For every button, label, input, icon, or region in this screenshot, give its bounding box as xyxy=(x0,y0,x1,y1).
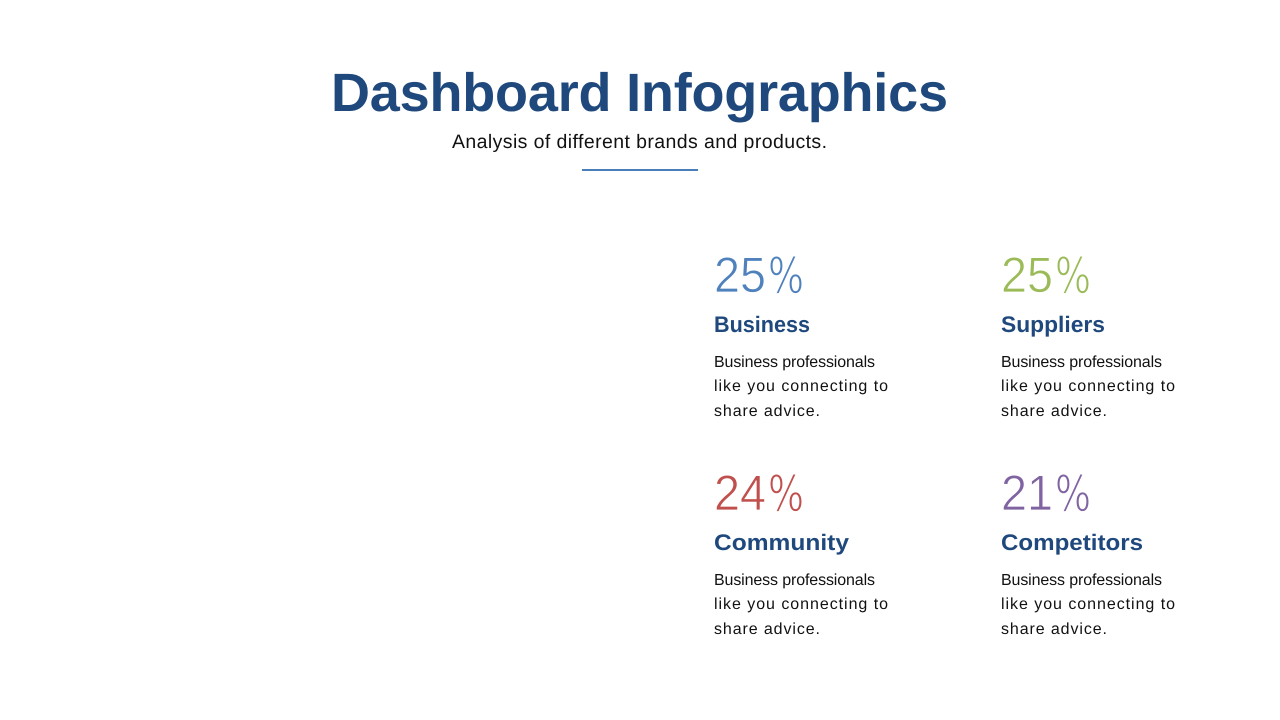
text block: competitors description: Business professionals xyxy=(1001,572,1162,589)
text block: suppliers description: share advice. xyxy=(1001,403,1107,420)
panel: competitors xyxy=(1001,465,1175,638)
text block: competitors description: like you connecting to xyxy=(1001,596,1175,613)
stat: 24% community: % xyxy=(768,465,804,523)
stat: 25% business: 25 xyxy=(714,247,766,303)
text block: community description: share advice. xyxy=(714,621,820,638)
text block: community description: Business professionals xyxy=(714,572,875,589)
panel: community xyxy=(714,465,888,638)
heading: business: Business xyxy=(714,312,810,337)
stat: 24% community: 24 xyxy=(714,465,766,521)
subtitle: Analysis of different brands and products. xyxy=(452,131,827,153)
stat: 25% suppliers: % xyxy=(1055,247,1091,305)
divider under the title xyxy=(582,169,698,171)
text block: suppliers description: Business professionals xyxy=(1001,354,1162,371)
stat: 21% competitors: % xyxy=(1055,465,1091,523)
title: Dashboard Infographics xyxy=(331,63,948,123)
stat: 21% competitors: 21 xyxy=(1001,465,1053,521)
heading: community: Community xyxy=(714,530,850,555)
panel: suppliers xyxy=(1001,247,1175,420)
panel: business xyxy=(714,247,888,420)
text block: community description: like you connecting to xyxy=(714,596,888,613)
text block: suppliers description: like you connecting to xyxy=(1001,378,1175,395)
text block: business description: like you connecting to xyxy=(714,378,888,395)
heading: competitors: Competitors xyxy=(1001,530,1143,555)
heading: suppliers: Suppliers xyxy=(1001,312,1105,337)
text block: business description: Business professionals xyxy=(714,354,875,371)
stat: 25% suppliers: 25 xyxy=(1001,247,1053,303)
text block: business description: share advice. xyxy=(714,403,820,420)
text block: competitors description: share advice. xyxy=(1001,621,1107,638)
stat: 25% business: % xyxy=(768,247,804,305)
